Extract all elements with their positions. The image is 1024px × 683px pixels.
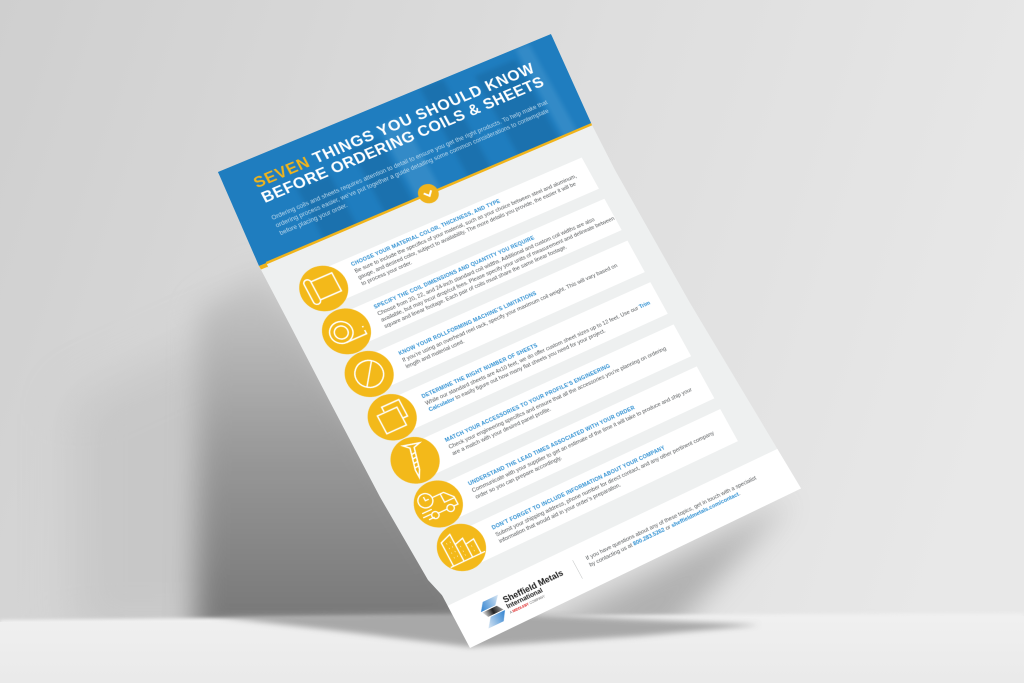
row 7 bar [456,409,738,566]
row 1 bar: CHOOSE YOUR MATERIAL COLOR, THICKNESS, AND TYPE [350,198,501,267]
row 7 bar: Submit your shipping address, phone number for direct contact, and any other pertinent company [494,430,715,538]
logo: International [495,578,536,598]
logo: A MIDDLEBY COMPANY [499,584,538,602]
icon: no-sign circle [344,350,394,398]
logo: Sheffield Metals [491,560,558,593]
icon: buildings [436,523,486,572]
row 3 bar: If you’re using an overhead reel rack, specify your maximum coil weight. This will vary based on [401,262,618,363]
row 2 bar [339,199,622,347]
row 6 bar: Communicate with your supplier to get an estimate of the time it will take to produce and ship your [471,386,693,494]
row 4 bar [385,282,668,434]
header band [218,34,600,264]
row 6 bar: order so you can prepare accordingly. [474,455,563,500]
intro text: before placing your order. [278,202,349,237]
title: BEFORE ORDERING COILS & SHEETS [258,73,547,206]
row 3 bar: length and material used. [404,338,465,370]
row 1 bar: gauge, and desired color, subject to availability. The more details you provide, the easier it will be [357,181,577,280]
row 6 bar: UNDERSTAND THE LEAD TIMES ASSOCIATED WITH YOUR ORDER [467,404,636,487]
poster sheet [218,34,802,648]
title: SEVEN THINGS YOU SHOULD KNOW [250,59,538,191]
footer [448,448,802,648]
logo [480,560,564,628]
row 7 bar: DON’T FORGET TO INCLUDE INFORMATION ABOUT YOUR COMPANY [491,444,666,531]
icon: screw [390,436,440,484]
footer contact text: by contacting us at 800.283.5262 or sheffieldmetals.com/contact. [588,491,742,568]
row 2 bar: available, but may incur drop/cut fees. Please specify your units of measurement and delineate between [380,215,616,323]
row 5 bar: are a match with your desired panel profile. [451,406,552,456]
row 1 bar: Be sure to include the specifics of your material, such as your choice between steel and aluminum, [354,173,578,274]
row 1 bar [317,158,599,304]
row 2 bar: Choose from 20, 22, and 24-inch standard coil widths. Additional and custom coil widths are also [376,216,596,317]
row 6 bar [432,366,714,522]
icon: coil roll [298,265,348,312]
icon: header check badge [418,184,439,204]
row 5 bar [409,324,691,478]
intro text: Ordering coils and sheets requires attention to detail to ensure you get the right products. To help make that [270,99,549,221]
page left edge bow [259,266,480,620]
row 7 bar: information that would aid in your order’s preparation. [498,482,622,544]
icon: measuring tape [322,308,372,355]
intro text: ordering process easier, we’ve put together a guide detailing some common considerations to contemplate [274,107,550,229]
row 1 bar: to process your order. [360,260,413,287]
footer contact text: If you have questions about any of these topics, get in touch with a specialist [585,475,758,562]
row 2 bar: square and linear footage. Each pair of coils must share the same linear footage. [383,244,568,329]
row 2 bar: SPECIFY THE COIL DIMENSIONS AND QUANTITY YOU REQUIRE [373,235,536,310]
icon: stacked sheets [367,394,418,441]
row 4 bar: While our standard sheets are 4x10 feet, we do offer custom sheet sizes up to 12 feet. Use our Trim [424,300,651,406]
row 4 bar: Calculator to easily figure out how many flat sheets you need for your project. [428,328,607,413]
row 3 bar [362,241,645,391]
row 5 bar: MATCH YOUR ACCESSORIES TO YOUR PROFILE’S ENGINEERING [444,363,611,443]
row 4 bar: DETERMINE THE RIGHT NUMBER OF SHEETS [420,342,539,399]
row 3 bar: KNOW YOUR ROLLFORMING MACHINE’S LIMITATIONS [397,290,538,356]
row 5 bar: Check your engineering specifics and ensure that all the accessories you’re planning on ordering [447,345,667,450]
icon: delivery truck with clock [413,480,464,528]
